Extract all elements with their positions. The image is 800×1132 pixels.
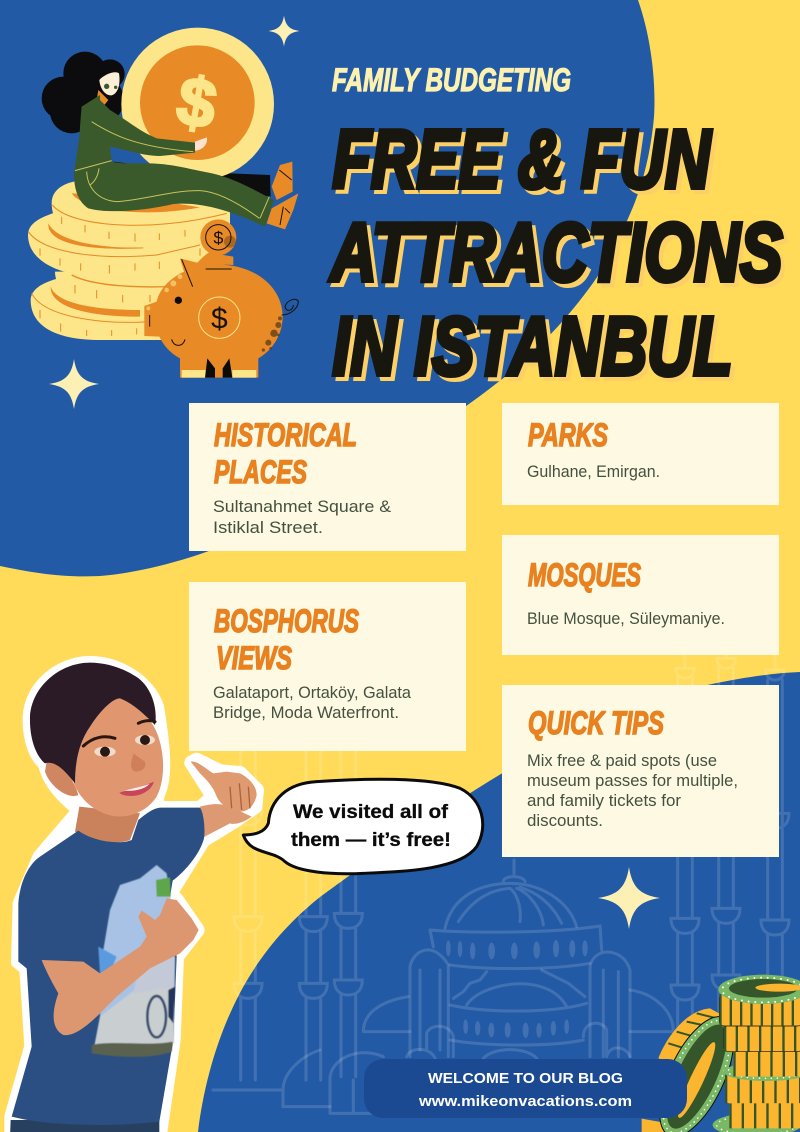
neck: [75, 807, 140, 843]
subtitle: FAMILY BUDGETING: [332, 62, 571, 98]
illustration: woman with coin, coin stack and piggy bank: [28, 28, 298, 378]
icon: sparkle left: [49, 359, 99, 409]
hair: [30, 663, 156, 783]
photo cut-out: boy pointing at himself: [10, 663, 257, 1132]
panel: quick tips: [502, 685, 779, 857]
nose: [131, 753, 145, 772]
panel: historical places: HISTORICAL: [214, 417, 357, 453]
title shadow: [333, 116, 786, 396]
panel: parks: Gulhane, Emirgan.: [527, 463, 660, 481]
piggy bank: [144, 252, 298, 378]
title text: [329, 112, 782, 392]
mosque line illustration: [213, 638, 789, 1113]
panel: parks: PARKS: [528, 417, 608, 453]
white sticker outline: [12, 663, 257, 1132]
coin stack: [28, 181, 230, 340]
smile: [119, 782, 154, 796]
hair: [42, 52, 125, 133]
panel: bosphorus views: [189, 582, 466, 751]
raised arm: [200, 804, 252, 837]
speech bubble: [243, 779, 483, 874]
small coin: $: [213, 228, 223, 248]
illustration: coin stack: [713, 975, 800, 1132]
small coin: [200, 219, 236, 255]
title: [329, 112, 786, 396]
background: top blue wave: [0, 0, 654, 576]
garment seams: [75, 122, 269, 218]
illustration: rolling coin: [642, 1006, 749, 1132]
big coin: $: [171, 62, 222, 144]
panel: bosphorus views: VIEWS: [216, 640, 292, 676]
jeans: [10, 1120, 159, 1132]
panel: bosphorus views: BOSPHORUS: [214, 603, 359, 639]
ear: [45, 761, 78, 796]
panel: mosques: [502, 535, 779, 655]
panel: quick tips: QUICK TIPS: [528, 705, 664, 741]
leg behind: [113, 162, 271, 197]
panel: quick tips: discounts.: [527, 812, 603, 830]
icon: sparkle bottom: [598, 867, 660, 929]
blog banner: www.mikeonvacations.com: [418, 1093, 632, 1110]
panel: quick tips: Mix free & paid spots (use: [527, 752, 717, 770]
big coin: [121, 28, 274, 180]
woman body: [74, 95, 274, 227]
panel: bosphorus views: Galataport, Ortaköy, Galata: [213, 684, 412, 702]
blog banner: WELCOME TO OUR BLOG: [428, 1070, 623, 1087]
t-shirt print: [92, 865, 175, 1057]
eyebrows: [83, 721, 155, 746]
speech bubble: We visited all of: [293, 802, 449, 823]
eyes: [94, 747, 116, 757]
icon: sparkle top: [268, 16, 300, 46]
panel: historical places: Sultanahmet Square &: [213, 498, 391, 516]
background: bottom blue wave: [198, 672, 800, 1132]
panel: quick tips: and family tickets for: [527, 792, 682, 810]
panel: bosphorus views: Bridge, Moda Waterfront.: [213, 704, 399, 722]
hand: [195, 137, 207, 151]
panel: historical places: Istiklal Street.: [213, 519, 323, 537]
shoes: [267, 162, 298, 229]
panel: historical places: PLACES: [214, 454, 307, 490]
t-shirt: [12, 808, 204, 1125]
woman face: [97, 72, 120, 108]
panel: quick tips: museum passes for multiple,: [527, 772, 738, 790]
panel: mosques: MOSQUES: [528, 557, 641, 593]
panel: mosques: Blue Mosque, Süleymaniye.: [527, 610, 725, 628]
panel: parks: [502, 403, 779, 505]
speech bubble: them — it’s free!: [291, 830, 451, 851]
thumbs-up hand: [191, 761, 257, 812]
blog banner: [364, 1059, 687, 1118]
piggy bank: $: [211, 302, 228, 335]
fist and forearm: [42, 898, 199, 1035]
face: [74, 698, 163, 816]
panel: historical places: [189, 403, 466, 551]
